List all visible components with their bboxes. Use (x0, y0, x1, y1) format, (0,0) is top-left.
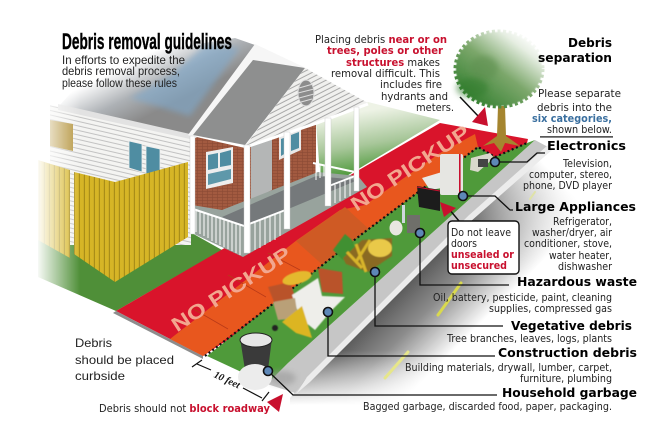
road (285, 130, 660, 428)
placement note: removal difficult. This (331, 68, 440, 80)
placement note: structures makes (346, 57, 440, 69)
dimension: 10 feet (192, 360, 269, 401)
category: large appliances: dishwasher (558, 261, 613, 273)
sidewalk orange section (170, 134, 478, 356)
arrow: to tree (460, 97, 488, 126)
callout line: electronics (490, 153, 545, 166)
callout box: doors warning: unsealed or (451, 249, 515, 261)
category: household garbage: Household garbage (502, 385, 637, 400)
category: electronics: Electronics (547, 138, 626, 153)
category: construction debris: furniture, plumbing (520, 373, 612, 385)
intro text: please follow these rules (62, 76, 177, 90)
curbside note: Debris (75, 336, 112, 350)
category: hazardous waste: Hazardous waste (517, 274, 637, 289)
category: construction debris: Construction debris (498, 345, 637, 360)
debris: household garbage can and bag (238, 333, 296, 390)
placement note: includes fire (380, 79, 442, 91)
debris: vegetative pile (333, 234, 392, 272)
category: hazardous waste (433, 274, 637, 315)
front window (206, 147, 233, 189)
category: vegetative debris: Tree branches, leaves, logs, plants (446, 333, 612, 345)
intro text: In efforts to expedite the (62, 53, 185, 67)
callout line: large appliances (458, 192, 513, 210)
arrow: to appliances (440, 202, 459, 221)
front lawn and back lawn (38, 102, 440, 311)
house: left siding wall (50, 104, 191, 245)
category: household garbage: Bagged garbage, discarded food, paper, packaging. (363, 401, 612, 413)
placement note: meters. (416, 102, 454, 114)
category: large appliances: Refrigerator, (553, 216, 612, 228)
category: electronics (523, 138, 626, 192)
curbside note: curbside (75, 369, 125, 383)
NO PICKUP lettering (168, 122, 474, 337)
gable vent (298, 80, 314, 106)
category: large appliances: washer/dryer, air (532, 227, 613, 239)
NO PICKUP lettering: NO PICKUP (168, 243, 295, 337)
callout line: construction debris (324, 308, 495, 356)
heading: debris separation: separation (538, 50, 612, 65)
placement note: Placing debris near or on (315, 34, 447, 46)
category: household garbage (363, 385, 637, 413)
placement note: hydrants and (381, 91, 448, 103)
category: large appliances: conditioner, stove, (524, 238, 612, 250)
roadway note: Debris should not block roadway (99, 403, 270, 415)
category: electronics: Television, (562, 158, 612, 170)
callout line: vegetative debris (370, 268, 503, 326)
NO PICKUP lettering: NO PICKUP (347, 122, 474, 216)
callout line: hazardous waste (416, 228, 509, 285)
callout box: doors warning: Do not leave (451, 227, 511, 239)
curbside note: should be placed (75, 353, 174, 367)
callout line: household garbage (264, 366, 497, 395)
category: vegetative debris: Vegetative debris (511, 318, 632, 333)
house: main roof (60, 38, 255, 135)
heading: debris separation: Debris (568, 35, 612, 50)
porch back wall and door (250, 122, 316, 212)
sidewalk strip: red no pickup zone (113, 123, 528, 359)
separation note: six categories, (532, 113, 612, 125)
fence (38, 160, 188, 282)
curbside note (75, 336, 174, 383)
debris: electronics (470, 153, 494, 172)
category: hazardous waste: Oil, battery, pesticide, paint, cleaning (433, 292, 612, 304)
debris: construction pile (268, 268, 345, 338)
green curb strip (207, 140, 535, 384)
dimension: 10 feet: 10 feet (212, 370, 243, 392)
separation note: shown below. (547, 124, 612, 136)
porch railings (193, 163, 355, 255)
debris: large appliances (417, 154, 463, 211)
callout box: doors warning: unsecured (451, 260, 507, 272)
road marking: yellow dashes (385, 192, 535, 378)
separation note: debris into the (537, 102, 612, 114)
dotted pickup boundary (205, 143, 527, 356)
category: large appliances (515, 199, 636, 273)
category: electronics: computer, stereo, (529, 169, 612, 181)
porch floor and foundation (192, 172, 367, 257)
category: electronics: phone, DVD player (523, 180, 613, 192)
side wall windows (129, 141, 160, 178)
intro text: debris removal process, (62, 64, 180, 78)
callout box: doors warning: doors (451, 238, 477, 250)
curb (267, 140, 552, 394)
title: Debris removal guidelines (62, 29, 232, 54)
side wall window tint (50, 120, 73, 151)
category: large appliances: water heater, (549, 250, 612, 262)
porch roof and gable (188, 44, 368, 147)
debris: hazardous waste (390, 205, 420, 236)
placement note (315, 34, 454, 114)
porch posts (190, 107, 359, 253)
separation note (532, 88, 621, 138)
house left fade (30, 90, 80, 305)
placement note: trees, poles or other (327, 45, 444, 57)
callout box: doors warning (448, 221, 519, 274)
arrow: roadway (267, 394, 283, 412)
house: brick front wall (192, 136, 245, 250)
category: construction debris: Building materials, drywall, lumber, carpet, (405, 362, 612, 374)
category: construction debris (405, 345, 637, 385)
category: large appliances: Large Appliances (515, 199, 636, 214)
heading: debris separation (538, 35, 612, 65)
intro text (62, 53, 185, 90)
separation note: Please separate (538, 88, 621, 100)
category: vegetative debris (446, 318, 632, 345)
category: hazardous waste: supplies, compressed gas (489, 303, 612, 315)
tree (456, 32, 542, 152)
